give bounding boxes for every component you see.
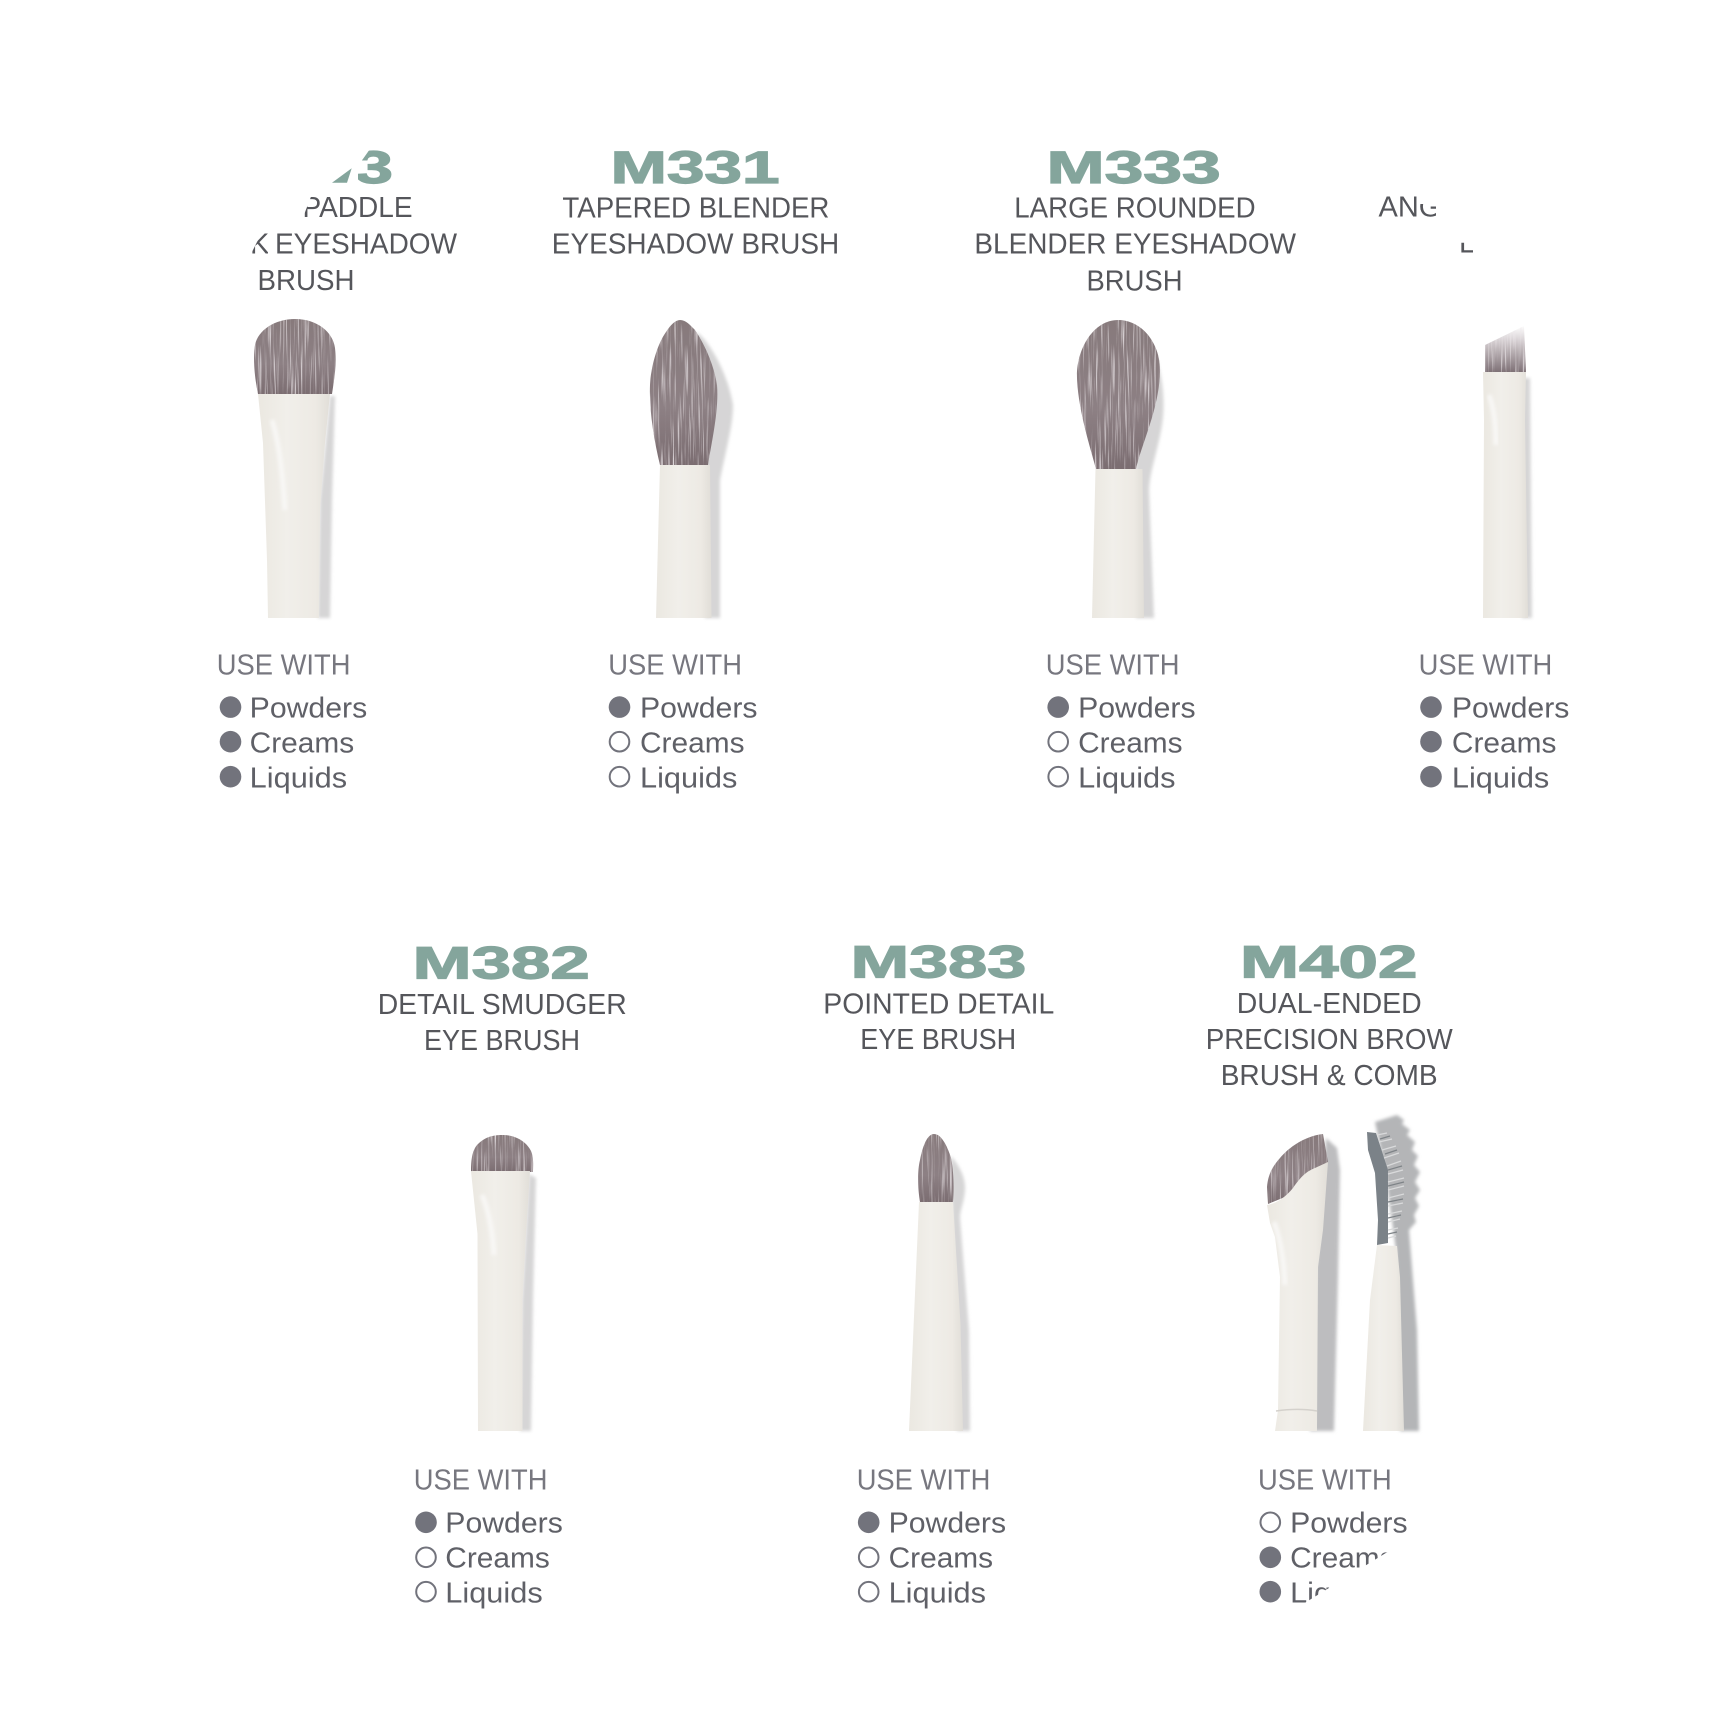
product name: M333: BRUSH — [1086, 265, 1182, 297]
product name: M331 — [552, 193, 839, 261]
use-with list: Powders — [1452, 693, 1569, 725]
use with label: USE WITH — [414, 1465, 548, 1497]
panel: M382 brush — [378, 937, 627, 1610]
use-with list: Powders — [250, 693, 367, 725]
product name: M402 — [1206, 988, 1453, 1092]
use with label: USE WITH — [608, 649, 742, 681]
icon: angled brush — [1483, 326, 1532, 618]
panel: M383 brush — [823, 936, 1054, 1610]
use-with list: Creams — [1452, 727, 1556, 759]
icon: brow comb end — [1363, 1115, 1420, 1431]
product name: M383 — [823, 988, 1054, 1056]
product name: M402: PRECISION BROW — [1206, 1024, 1453, 1056]
icon: tapered blender brush — [650, 320, 733, 618]
use with label: USE WITH — [1046, 649, 1180, 681]
product name: angled brush (partly masked): L — [1459, 228, 1475, 260]
use-with list (partly masked) — [1260, 1512, 1406, 1602]
model code: M323 (partly masked): M323 — [221, 142, 393, 193]
model code: M402: M402 — [1240, 936, 1417, 987]
product name: M331: EYESHADOW BRUSH — [552, 229, 839, 261]
use-with list: Liquids — [445, 1578, 543, 1610]
panel: angled brush — [1378, 192, 1569, 794]
model code: M382: M382 — [413, 937, 590, 988]
use-with list — [1047, 693, 1196, 794]
icon: brow brush end — [1267, 1134, 1340, 1431]
use-with list: Powders — [889, 1508, 1006, 1540]
product name: M382: EYE BRUSH — [424, 1025, 580, 1057]
product name: M382 — [378, 989, 627, 1057]
panel: M333 brush — [974, 142, 1297, 794]
use with label: USE WITH — [1419, 649, 1552, 681]
use-with list: Powders — [640, 693, 758, 725]
use-with list: Creams — [445, 1543, 550, 1575]
icon: detail smudger brush — [471, 1135, 536, 1431]
product name: M333: BLENDER EYESHADOW — [974, 229, 1297, 261]
use-with list: Liquids — [250, 762, 347, 794]
use-with list — [858, 1508, 1006, 1610]
model code: M323 (partly masked) — [332, 150, 392, 184]
use with label: USE WITH — [857, 1465, 990, 1497]
use with label: USE WITH — [1258, 1465, 1392, 1497]
use-with list: Liquids — [1452, 762, 1549, 794]
use-with list: Powders — [445, 1508, 563, 1540]
product name: M323: PADDLE — [302, 192, 412, 224]
icon: large rounded blender brush — [1077, 320, 1164, 618]
use-with list: Creams — [640, 727, 744, 759]
use with label: USE WITH — [217, 649, 350, 681]
icon: pointed detail brush — [909, 1134, 970, 1431]
product name: M383: POINTED DETAIL — [823, 988, 1054, 1020]
product name: angled brush (partly masked) — [1378, 196, 1473, 252]
use-with list (partly masked): Powders — [1290, 1508, 1408, 1540]
product name: M323: EYESHADOW — [275, 228, 458, 260]
product name: M402: BRUSH & COMB — [1221, 1060, 1438, 1092]
use-with list (partly masked): Liquids — [1290, 1578, 1388, 1610]
use-with list — [609, 693, 758, 794]
icon: paddle eyeshadow brush — [254, 319, 336, 618]
panel: M323 brush — [217, 142, 458, 794]
use-with list — [1420, 693, 1569, 794]
product name: M323: K — [250, 228, 270, 260]
use-with list: Liquids — [1078, 762, 1176, 794]
product name: M333: LARGE ROUNDED — [1014, 193, 1256, 225]
product name: M323 — [252, 197, 457, 290]
model code: M333: M333 — [1047, 142, 1221, 193]
product name: angled brush (partly masked): ANG — [1378, 192, 1441, 224]
panel: M402 brush — [1206, 936, 1453, 1610]
use-with list: Creams — [889, 1543, 993, 1575]
model code: M331: M331 — [611, 142, 780, 193]
use-with list: Creams — [250, 727, 354, 759]
use-with list — [220, 693, 367, 794]
product name: M383: EYE BRUSH — [860, 1024, 1016, 1056]
model code: M383: M383 — [851, 936, 1026, 988]
product name: M382: DETAIL SMUDGER — [378, 989, 627, 1021]
use-with list — [415, 1508, 563, 1610]
panel: M331 brush — [552, 142, 839, 794]
product name: M331: TAPERED BLENDER — [562, 193, 829, 225]
product name: M333 — [974, 193, 1297, 297]
use-with list: Creams — [1078, 727, 1183, 759]
use-with list: Liquids — [889, 1578, 986, 1610]
product name: M323: BRUSH — [258, 265, 354, 297]
product name: M402: DUAL-ENDED — [1237, 988, 1422, 1020]
use-with list: Powders — [1078, 693, 1196, 725]
use-with list (partly masked): Creams — [1290, 1543, 1395, 1575]
use-with list: Liquids — [640, 762, 737, 794]
